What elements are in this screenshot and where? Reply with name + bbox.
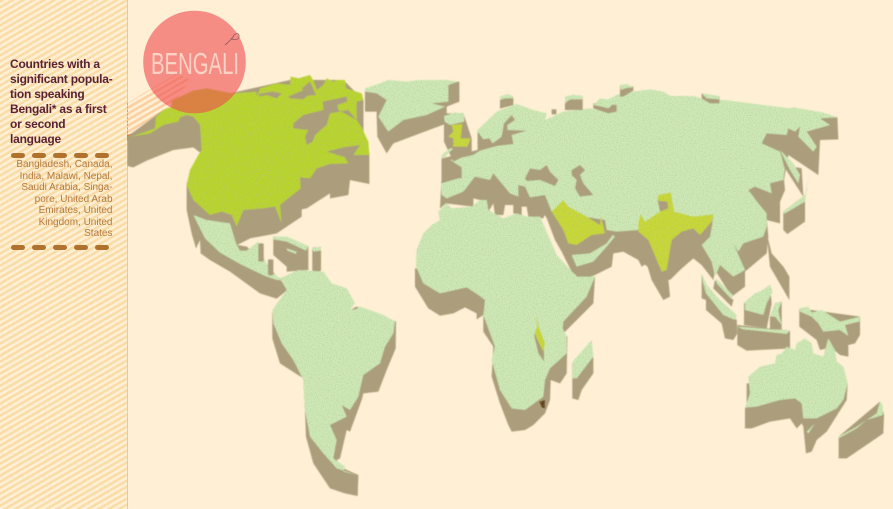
text block: country list: Bangladesh, Canada, bbox=[16, 159, 112, 170]
beam edge dashes bbox=[126, 103, 128, 135]
panel: sidebar bbox=[0, 0, 128, 509]
South America bbox=[272, 270, 396, 496]
text block: country list bbox=[16, 159, 112, 239]
heading: or second bbox=[10, 117, 65, 131]
hand-lettered label: BENGALI bbox=[151, 46, 239, 81]
text block: country list: pore, United Arab bbox=[35, 194, 112, 205]
heading: tion speaking bbox=[10, 87, 84, 101]
red marker point bbox=[127, 133, 134, 141]
divider: top dashes bbox=[11, 153, 109, 158]
heading bbox=[10, 57, 112, 146]
Greenland bbox=[365, 80, 459, 153]
heading: Countries with a bbox=[10, 57, 100, 71]
heading: Bengali* as a first bbox=[10, 102, 107, 116]
heading: significant popula- bbox=[10, 72, 112, 86]
North America and Mexico bbox=[127, 75, 369, 299]
Australia, New Guinea and New Zealand bbox=[745, 307, 884, 458]
Arctic islands: Iceland, Svalbard, Novaya Zemlya bbox=[500, 84, 719, 114]
text block: country list: Emirates, United bbox=[39, 205, 112, 216]
Caribbean islands bbox=[258, 237, 321, 275]
light beam stripes bbox=[127, 73, 190, 136]
Eurasia bbox=[440, 89, 838, 300]
divider: bottom dashes bbox=[11, 245, 109, 250]
Africa and Madagascar bbox=[415, 200, 595, 432]
heading: language bbox=[10, 132, 61, 146]
Southeast Asia islands bbox=[702, 273, 790, 351]
text block: country list: Kingdom, United bbox=[39, 217, 112, 228]
text block: country list: India, Malawi, Nepal, bbox=[20, 171, 112, 182]
text block: country list: States bbox=[84, 228, 112, 239]
callout circle: BENGALI bbox=[143, 11, 246, 113]
text block: country list: Saudi Arabia, Singa- bbox=[21, 182, 112, 193]
icon: pen squiggle bbox=[225, 34, 239, 45]
